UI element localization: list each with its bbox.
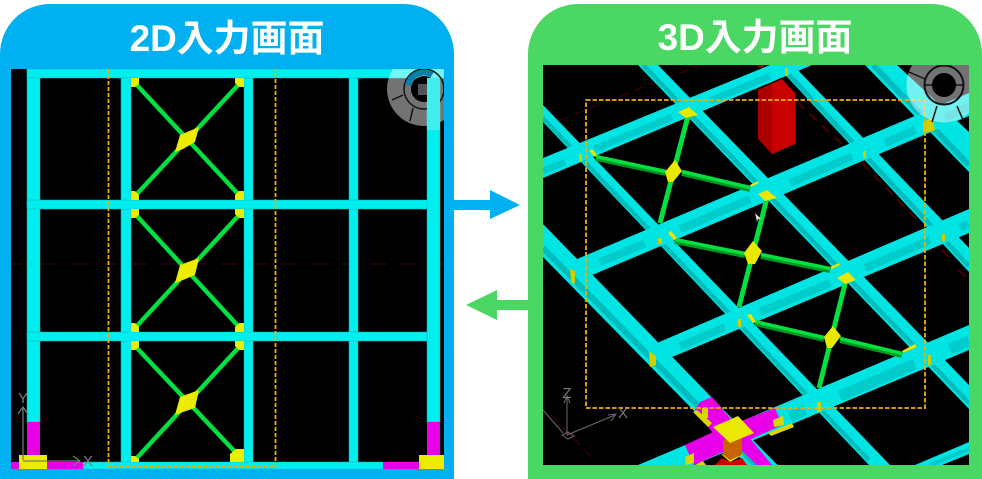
XYZ axis indicator: X <box>618 405 628 422</box>
rising cyan beams <box>543 65 969 465</box>
heading: 2D input screen: 2D入力画面 <box>130 18 324 59</box>
XY axis indicator: Y <box>18 390 28 407</box>
icon: view cube navigation <box>906 65 969 122</box>
panel: 2D input screen <box>0 4 461 479</box>
yellow gusset plates <box>570 68 945 412</box>
XYZ axis indicator: Z <box>562 385 572 402</box>
mouse cursor <box>755 213 761 222</box>
yellow gusset plates <box>131 78 244 462</box>
orange dashed boundary <box>108 69 276 466</box>
column base connection <box>685 397 794 465</box>
icon: view cube navigation <box>387 69 444 130</box>
panel: 3D input screen <box>528 4 982 479</box>
yellow base plates <box>19 455 444 469</box>
3D CAD viewport <box>543 48 982 478</box>
arrow: 3D to 2D <box>466 290 528 320</box>
descending cyan beams <box>543 65 969 478</box>
heading: 3D input screen: 3D入力画面 <box>658 17 852 58</box>
XYZ axis indicator <box>543 385 628 439</box>
red column <box>758 65 795 154</box>
green braces <box>596 116 902 388</box>
XY axis indicator: X <box>83 453 93 470</box>
magenta base members <box>11 422 444 469</box>
green X braces <box>135 83 240 460</box>
cyan frame members <box>27 69 444 469</box>
XY axis indicator <box>18 390 93 470</box>
2D CAD viewport <box>11 52 461 470</box>
orange dashed boundary <box>586 100 925 408</box>
arrow: 2D to 3D <box>454 190 520 219</box>
